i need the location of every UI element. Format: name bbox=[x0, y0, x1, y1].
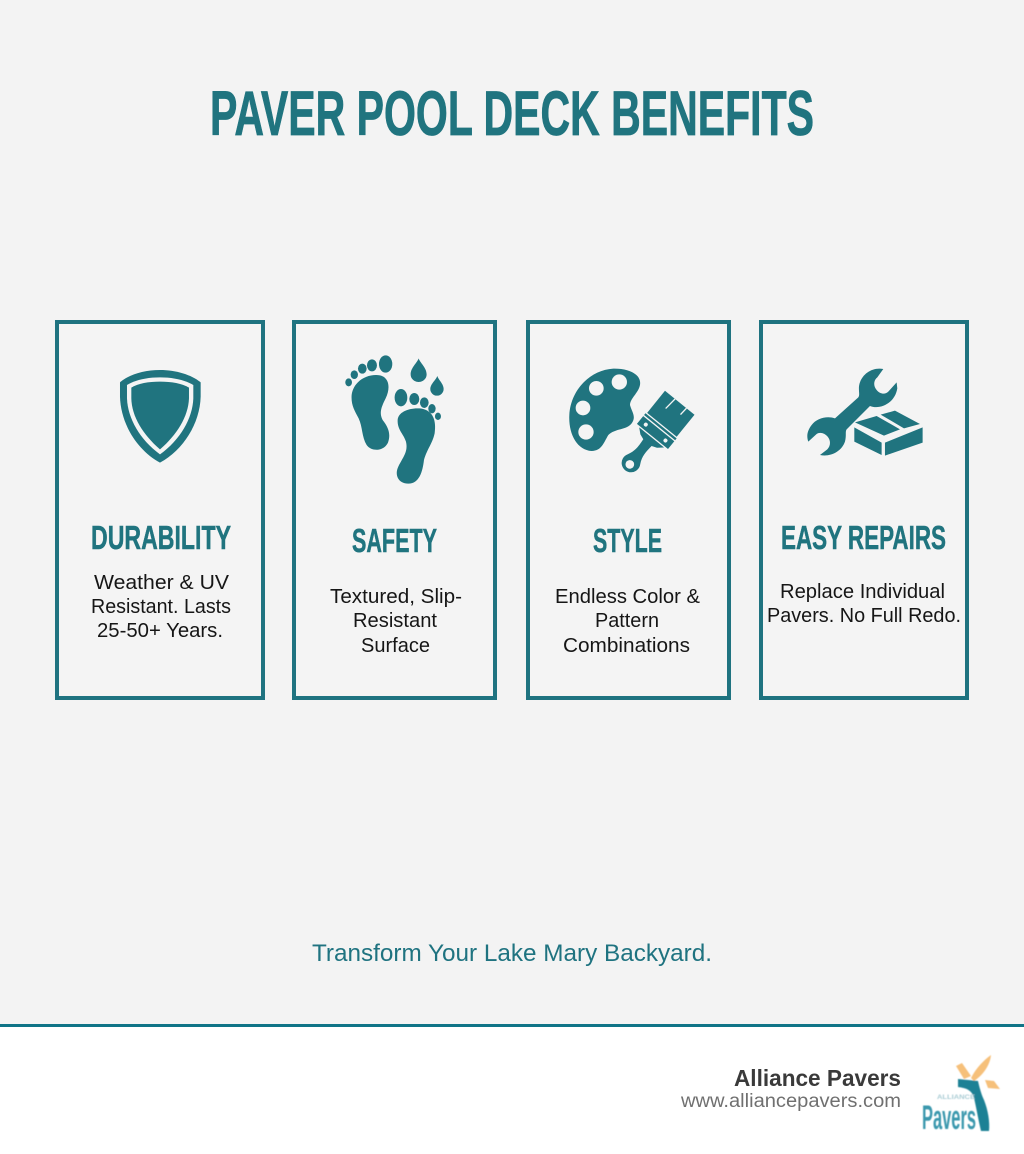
text: safety description: Textured, Slip- bbox=[330, 586, 462, 608]
text: easy repairs description: Replace Individual bbox=[780, 581, 945, 603]
text: easy repairs description bbox=[767, 581, 961, 627]
text: style description: Combinations bbox=[563, 635, 690, 657]
text: style description: Pattern bbox=[595, 610, 659, 632]
panel: durability bbox=[57, 322, 263, 698]
heading: durability: DURABILITY bbox=[91, 519, 231, 556]
text: style description bbox=[555, 586, 701, 657]
icon: footprints and water drops bbox=[345, 355, 444, 484]
heading: easy repairs: EASY REPAIRS bbox=[781, 519, 946, 556]
text: durability description bbox=[91, 572, 231, 642]
tagline: Transform Your Lake Mary Backyard. bbox=[312, 940, 712, 967]
text: safety description: Surface bbox=[361, 635, 430, 657]
logo: ALLIANCE bbox=[937, 1095, 975, 1101]
panel: safety bbox=[294, 322, 495, 698]
text: durability description: Weather & UV bbox=[94, 572, 230, 594]
text: safety description: Resistant bbox=[353, 610, 437, 632]
text: durability description: Resistant. Lasts bbox=[91, 596, 231, 618]
icon: wrench and paver bbox=[807, 369, 923, 456]
panel: style bbox=[528, 322, 729, 698]
text: style description: Endless Color & bbox=[555, 586, 701, 608]
text: durability description: 25-50+ Years. bbox=[97, 620, 223, 642]
icon: palette and paintbrush bbox=[569, 369, 695, 483]
heading: safety: SAFETY bbox=[352, 522, 437, 559]
brand name: Alliance Pavers bbox=[734, 1065, 901, 1091]
text: easy repairs description: Pavers. No Full Redo. bbox=[767, 605, 961, 627]
heading: style: STYLE bbox=[593, 522, 662, 559]
panel: easy repairs bbox=[761, 322, 967, 698]
text: safety description bbox=[330, 586, 462, 657]
footer bbox=[0, 1024, 1024, 1154]
website: www.alliancepavers.com bbox=[680, 1091, 901, 1112]
icon: shield bbox=[120, 370, 201, 463]
logo bbox=[922, 1055, 1000, 1137]
